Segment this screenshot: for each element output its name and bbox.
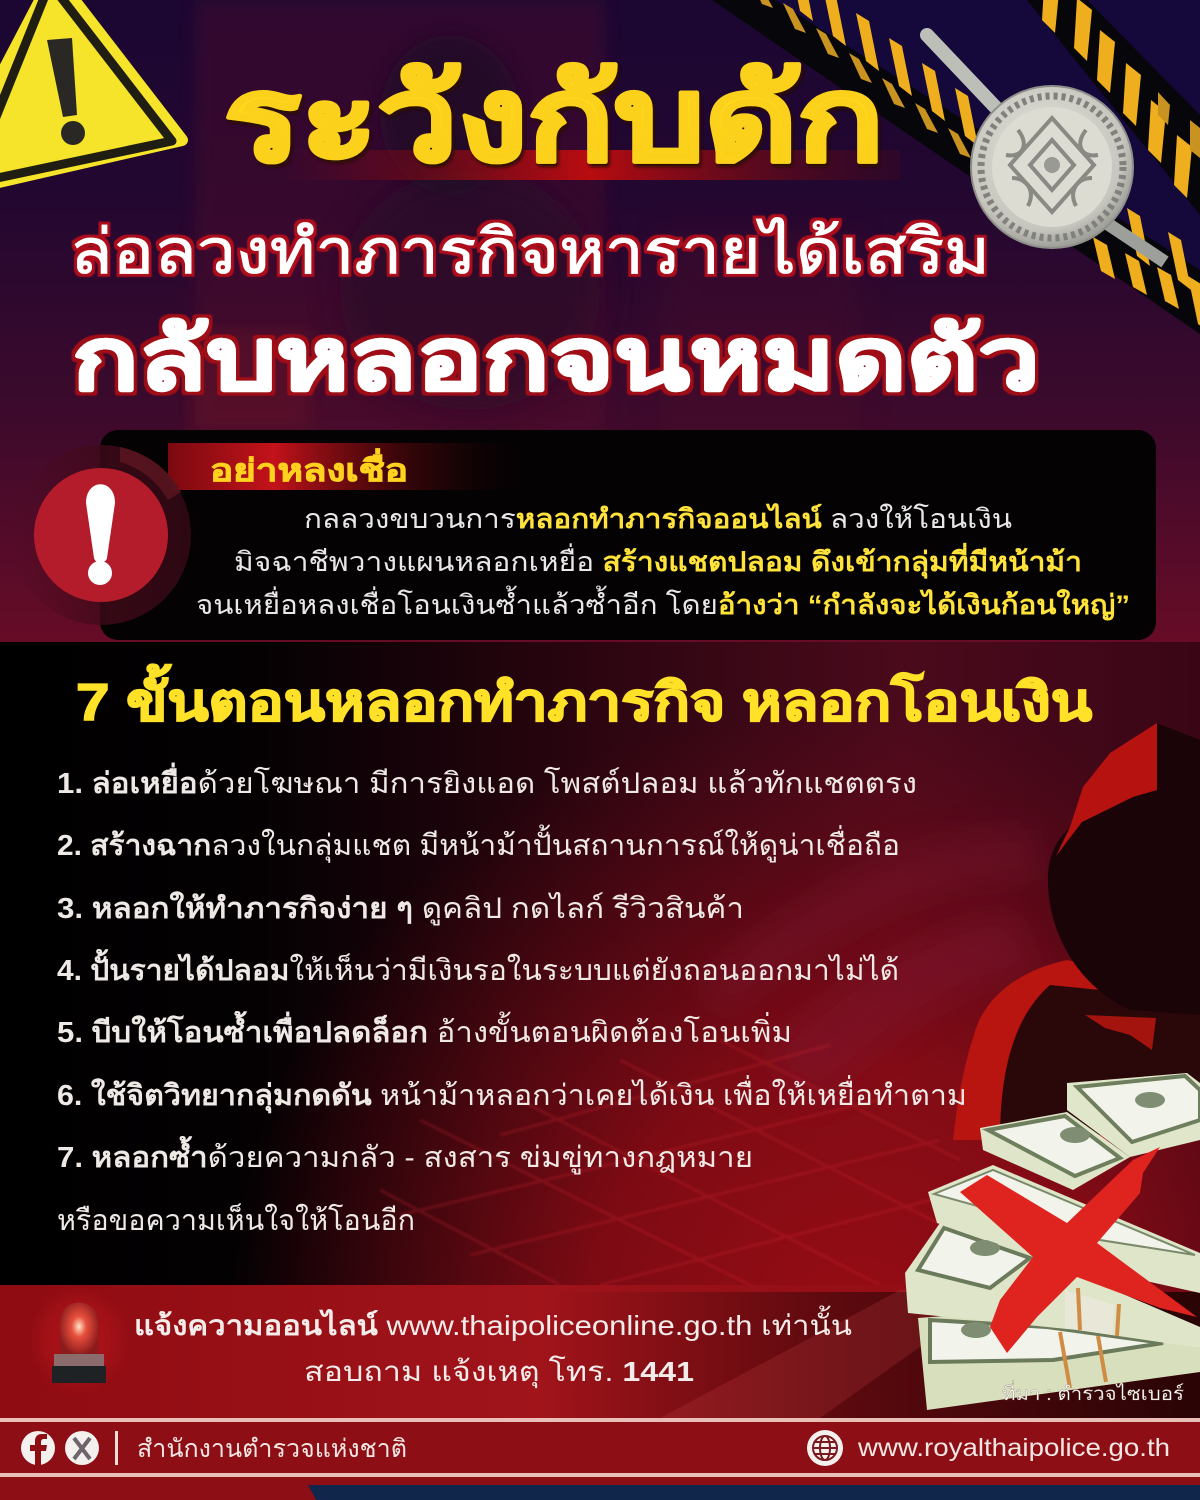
stack: lower middle bbox=[905, 1223, 1200, 1348]
subtitle line 2: กลับหลอกจนหมดตัว bbox=[72, 312, 1040, 408]
report text bbox=[134, 1305, 852, 1389]
footer band: report online bbox=[0, 1285, 1200, 1418]
list: 7 steps: 6. ใช้จิตวิทยากลุ่มกดดัน หน้าม้าหลอกว่าเคยได้เงิน เพื่อให้เหยื่อทำตาม bbox=[57, 1075, 967, 1113]
stack: bottom bbox=[918, 1312, 1200, 1410]
bottom strip bbox=[0, 1477, 1200, 1500]
list: 7 steps: 3. หลอกให้ทำภารกิจง่าย ๆ ดูคลิป กดไลก์ รีวิวสินค้า bbox=[57, 891, 744, 926]
panel: do not be fooled bbox=[100, 430, 1156, 640]
panel text bbox=[196, 503, 1130, 621]
keyboard texture bbox=[380, 1040, 1000, 1290]
stack: top right bbox=[1067, 1073, 1200, 1157]
list: 7 steps bbox=[57, 762, 967, 1237]
icon: X bbox=[65, 1431, 99, 1465]
icon: silver shield with sword bbox=[927, 35, 1165, 262]
title: ระวังกับดัก: ระวังกับดัก bbox=[224, 54, 884, 186]
straps bbox=[1060, 1288, 1119, 1388]
illustration: money stacks with red X bbox=[905, 1073, 1200, 1410]
list: 7 steps: 4. ปั้นรายได้ปลอมให้เห็นว่ามีเงินรอในระบบแต่ยังถอนออกมาไม่ได้ bbox=[57, 948, 899, 987]
footer bar: social and website: สำนักงานตำรวจแห่งชาติ bbox=[137, 1435, 407, 1463]
caution tape bbox=[712, 0, 1200, 334]
background: dark purple-maroon upper area bbox=[0, 0, 1200, 660]
panel text: กลลวงขบวนการ หลอกทำภารกิจออนไลน์ ลวงให้โอนเงิน bbox=[304, 503, 1012, 534]
stack: top left bbox=[980, 1112, 1130, 1190]
icon: red exclamation circle bbox=[11, 445, 191, 625]
panel text: จนเหยื่อหลงเชื่อโอนเงินซ้ำแล้วซ้ำอีก โดย อ้างว่า “กำลังจะได้เงินก้อนใหญ่” bbox=[196, 585, 1130, 621]
subtitle line 1: ล่อลวงทำภารกิจหารายได้เสริม bbox=[70, 217, 990, 287]
list: 7 steps: 5. บีบให้โอนซ้ำเพื่อปลดล็อก อ้างขั้นตอนผิดต้องโอนเพิ่ม bbox=[57, 1010, 792, 1049]
report text: สอบถาม แจ้งเหตุ โทร. 1441 bbox=[304, 1355, 694, 1389]
footer bar: social and website: www.royalthaipolice.go.th bbox=[857, 1434, 1170, 1462]
icon: facebook bbox=[21, 1431, 55, 1465]
list: 7 steps: 1. ล่อเหยื่อ ด้วยโฆษณา มีการยิงแอด โพสต์ปลอม แล้วทักแชตตรง bbox=[57, 762, 917, 800]
illustration: hooded hacker bbox=[953, 723, 1200, 1140]
list: 7 steps: หรือขอความเห็นใจให้โอนอีก bbox=[57, 1202, 415, 1237]
icon: globe bbox=[807, 1430, 843, 1466]
list: 7 steps: 7. หลอกซ้ำ ด้วยความกลัว - สงสาร ข่มขู่ทางกฎหมาย bbox=[57, 1135, 753, 1175]
icon: police siren bbox=[39, 1295, 119, 1385]
footer bar: social and website bbox=[0, 1418, 1200, 1478]
heading: 7 steps: 7 ขั้นตอนหลอกทำภารกิจ หลอกโอนเงิน bbox=[76, 664, 1093, 732]
panel text: มิจฉาชีพวางแผนหลอกเหยื่อ สร้างแชตปลอม ดึงเข้ากลุ่มที่มีหน้าม้า bbox=[234, 542, 1082, 579]
background: lower black and red section bbox=[0, 642, 1200, 1292]
icon: red X bbox=[960, 1147, 1197, 1353]
tag: อย่าหลงเชื่อ bbox=[168, 443, 520, 490]
stack: upper middle bbox=[928, 1165, 1200, 1293]
icon: warning triangle bbox=[0, 0, 182, 196]
source credit: ที่มา : ตำรวจไซเบอร์ bbox=[1002, 1380, 1184, 1405]
tag: อย่าหลงเชื่อ: อย่าหลงเชื่อ bbox=[210, 448, 408, 488]
report text: แจ้งความออนไลน์ www.thaipoliceonline.go.th เท่านั้น bbox=[134, 1305, 852, 1341]
list: 7 steps: 2. สร้างฉากลวงในกลุ่มแชต มีหน้าม้าปั้นสถานการณ์ให้ดูน่าเชื่อถือ bbox=[57, 824, 900, 863]
